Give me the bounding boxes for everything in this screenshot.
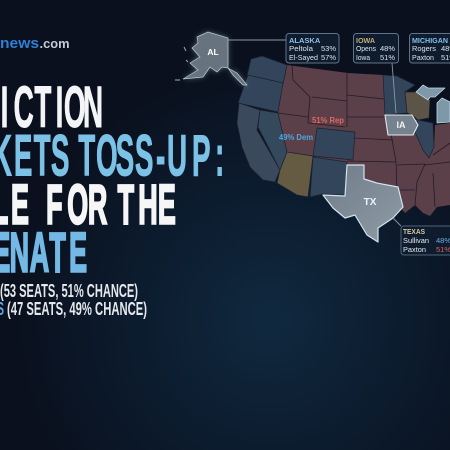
callout: Texas: Sullivan bbox=[403, 236, 429, 245]
callout: Texas: TEXAS bbox=[403, 227, 425, 236]
subtitle: seats and chances: (53 SEATS, 51% CHANCE) bbox=[0, 280, 138, 301]
callout: Alaska: Peltola bbox=[289, 44, 314, 53]
callout: Michigan: Paxton bbox=[412, 53, 434, 62]
label: 51% Rep: 51% Rep bbox=[312, 116, 344, 125]
subtitle: seats and chances: (47 SEATS, 49% CHANCE) bbox=[7, 298, 147, 319]
callout: Iowa: 48% bbox=[380, 44, 395, 53]
callout: Iowa: Iowa bbox=[356, 53, 371, 62]
state borders bbox=[278, 65, 450, 207]
red states bbox=[278, 65, 450, 216]
subtitle: seats and chances bbox=[0, 280, 147, 319]
title bbox=[0, 75, 224, 284]
connectors bbox=[228, 40, 401, 226]
callout: Alaska: ALASKA bbox=[289, 36, 321, 45]
callout: Alaska: 53% bbox=[321, 44, 336, 53]
label: TX: TX bbox=[364, 197, 377, 208]
michigan bbox=[416, 85, 450, 123]
texas bbox=[323, 165, 403, 242]
wisconsin bbox=[405, 92, 430, 120]
logo suffix: .com bbox=[40, 37, 70, 51]
callout: Alaska: El-Sayed bbox=[289, 53, 318, 62]
callout: Texas: Paxton bbox=[403, 245, 426, 254]
callout: Michigan bbox=[410, 34, 450, 63]
label: 49% Dem: 49% Dem bbox=[279, 133, 313, 142]
logo: news bbox=[0, 35, 39, 52]
blue states bbox=[237, 56, 434, 197]
callout: Iowa: 51% bbox=[380, 53, 395, 62]
map of United States bbox=[237, 56, 450, 242]
icon: Alaska glow shape: AL bbox=[207, 47, 219, 57]
callout: Texas bbox=[401, 226, 450, 255]
callout: Alaska: 57% bbox=[321, 53, 336, 62]
icon: Alaska glow shape bbox=[175, 32, 247, 85]
label: IA: IA bbox=[396, 120, 406, 130]
callout: Michigan: Rogers bbox=[412, 44, 436, 53]
callout: Alaska bbox=[286, 34, 339, 63]
callout: Iowa: Opens bbox=[356, 44, 376, 53]
callout: Michigan: MICHIGAN bbox=[412, 36, 448, 45]
callout: Iowa: IOWA bbox=[356, 36, 376, 45]
iowa bbox=[385, 115, 418, 135]
arizona bbox=[277, 152, 313, 197]
callout: Iowa bbox=[354, 34, 398, 63]
